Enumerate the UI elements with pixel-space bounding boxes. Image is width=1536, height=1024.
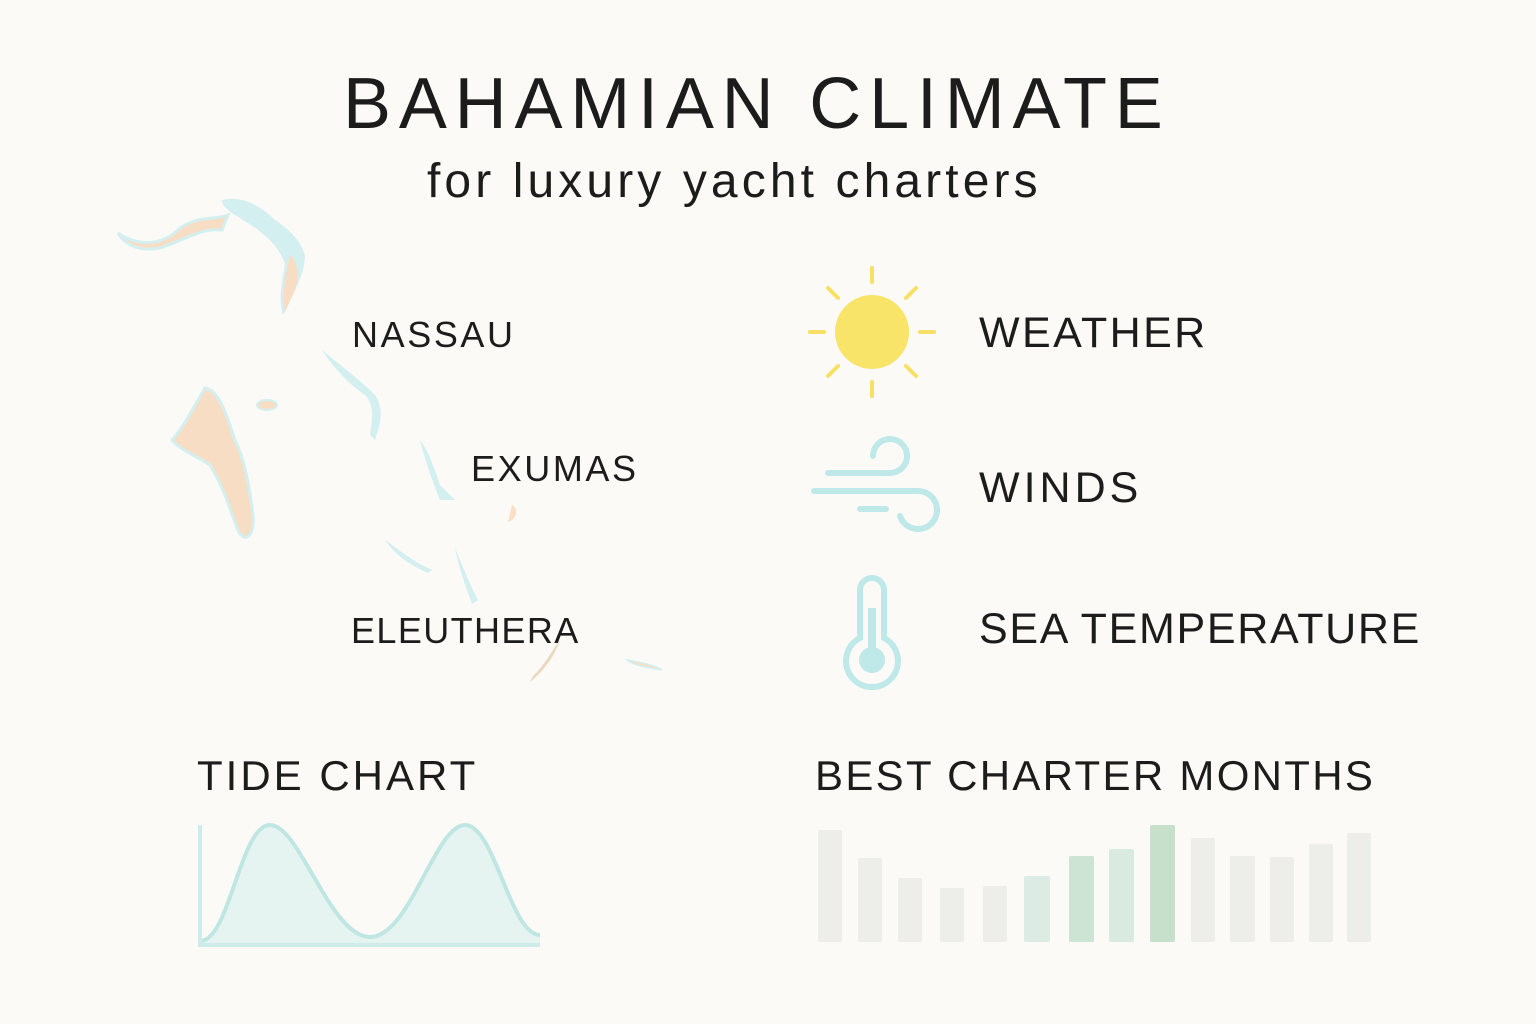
icon: sun [808,266,936,398]
label: Nassau: NASSAU [352,314,516,355]
heading: best charter months: BEST CHARTER MONTHS [815,752,1375,799]
title: BAHAMIAN CLIMATE [343,64,1171,144]
map of Bahamas [116,198,662,682]
label: winds: WINDS [979,464,1142,512]
icon: wind [811,436,940,532]
heading: tide chart: TIDE CHART [197,752,478,799]
bar chart: best charter months [818,825,1371,942]
subtitle: for luxury yacht charters [427,155,1042,208]
label: Eleuthera: ELEUTHERA [351,610,580,651]
label: Exumas: EXUMAS [471,448,639,489]
icon: thermometer [843,575,901,690]
tide chart [198,823,540,947]
label: sea temperature: SEA TEMPERATURE [979,605,1421,653]
label: weather: WEATHER [979,309,1208,357]
